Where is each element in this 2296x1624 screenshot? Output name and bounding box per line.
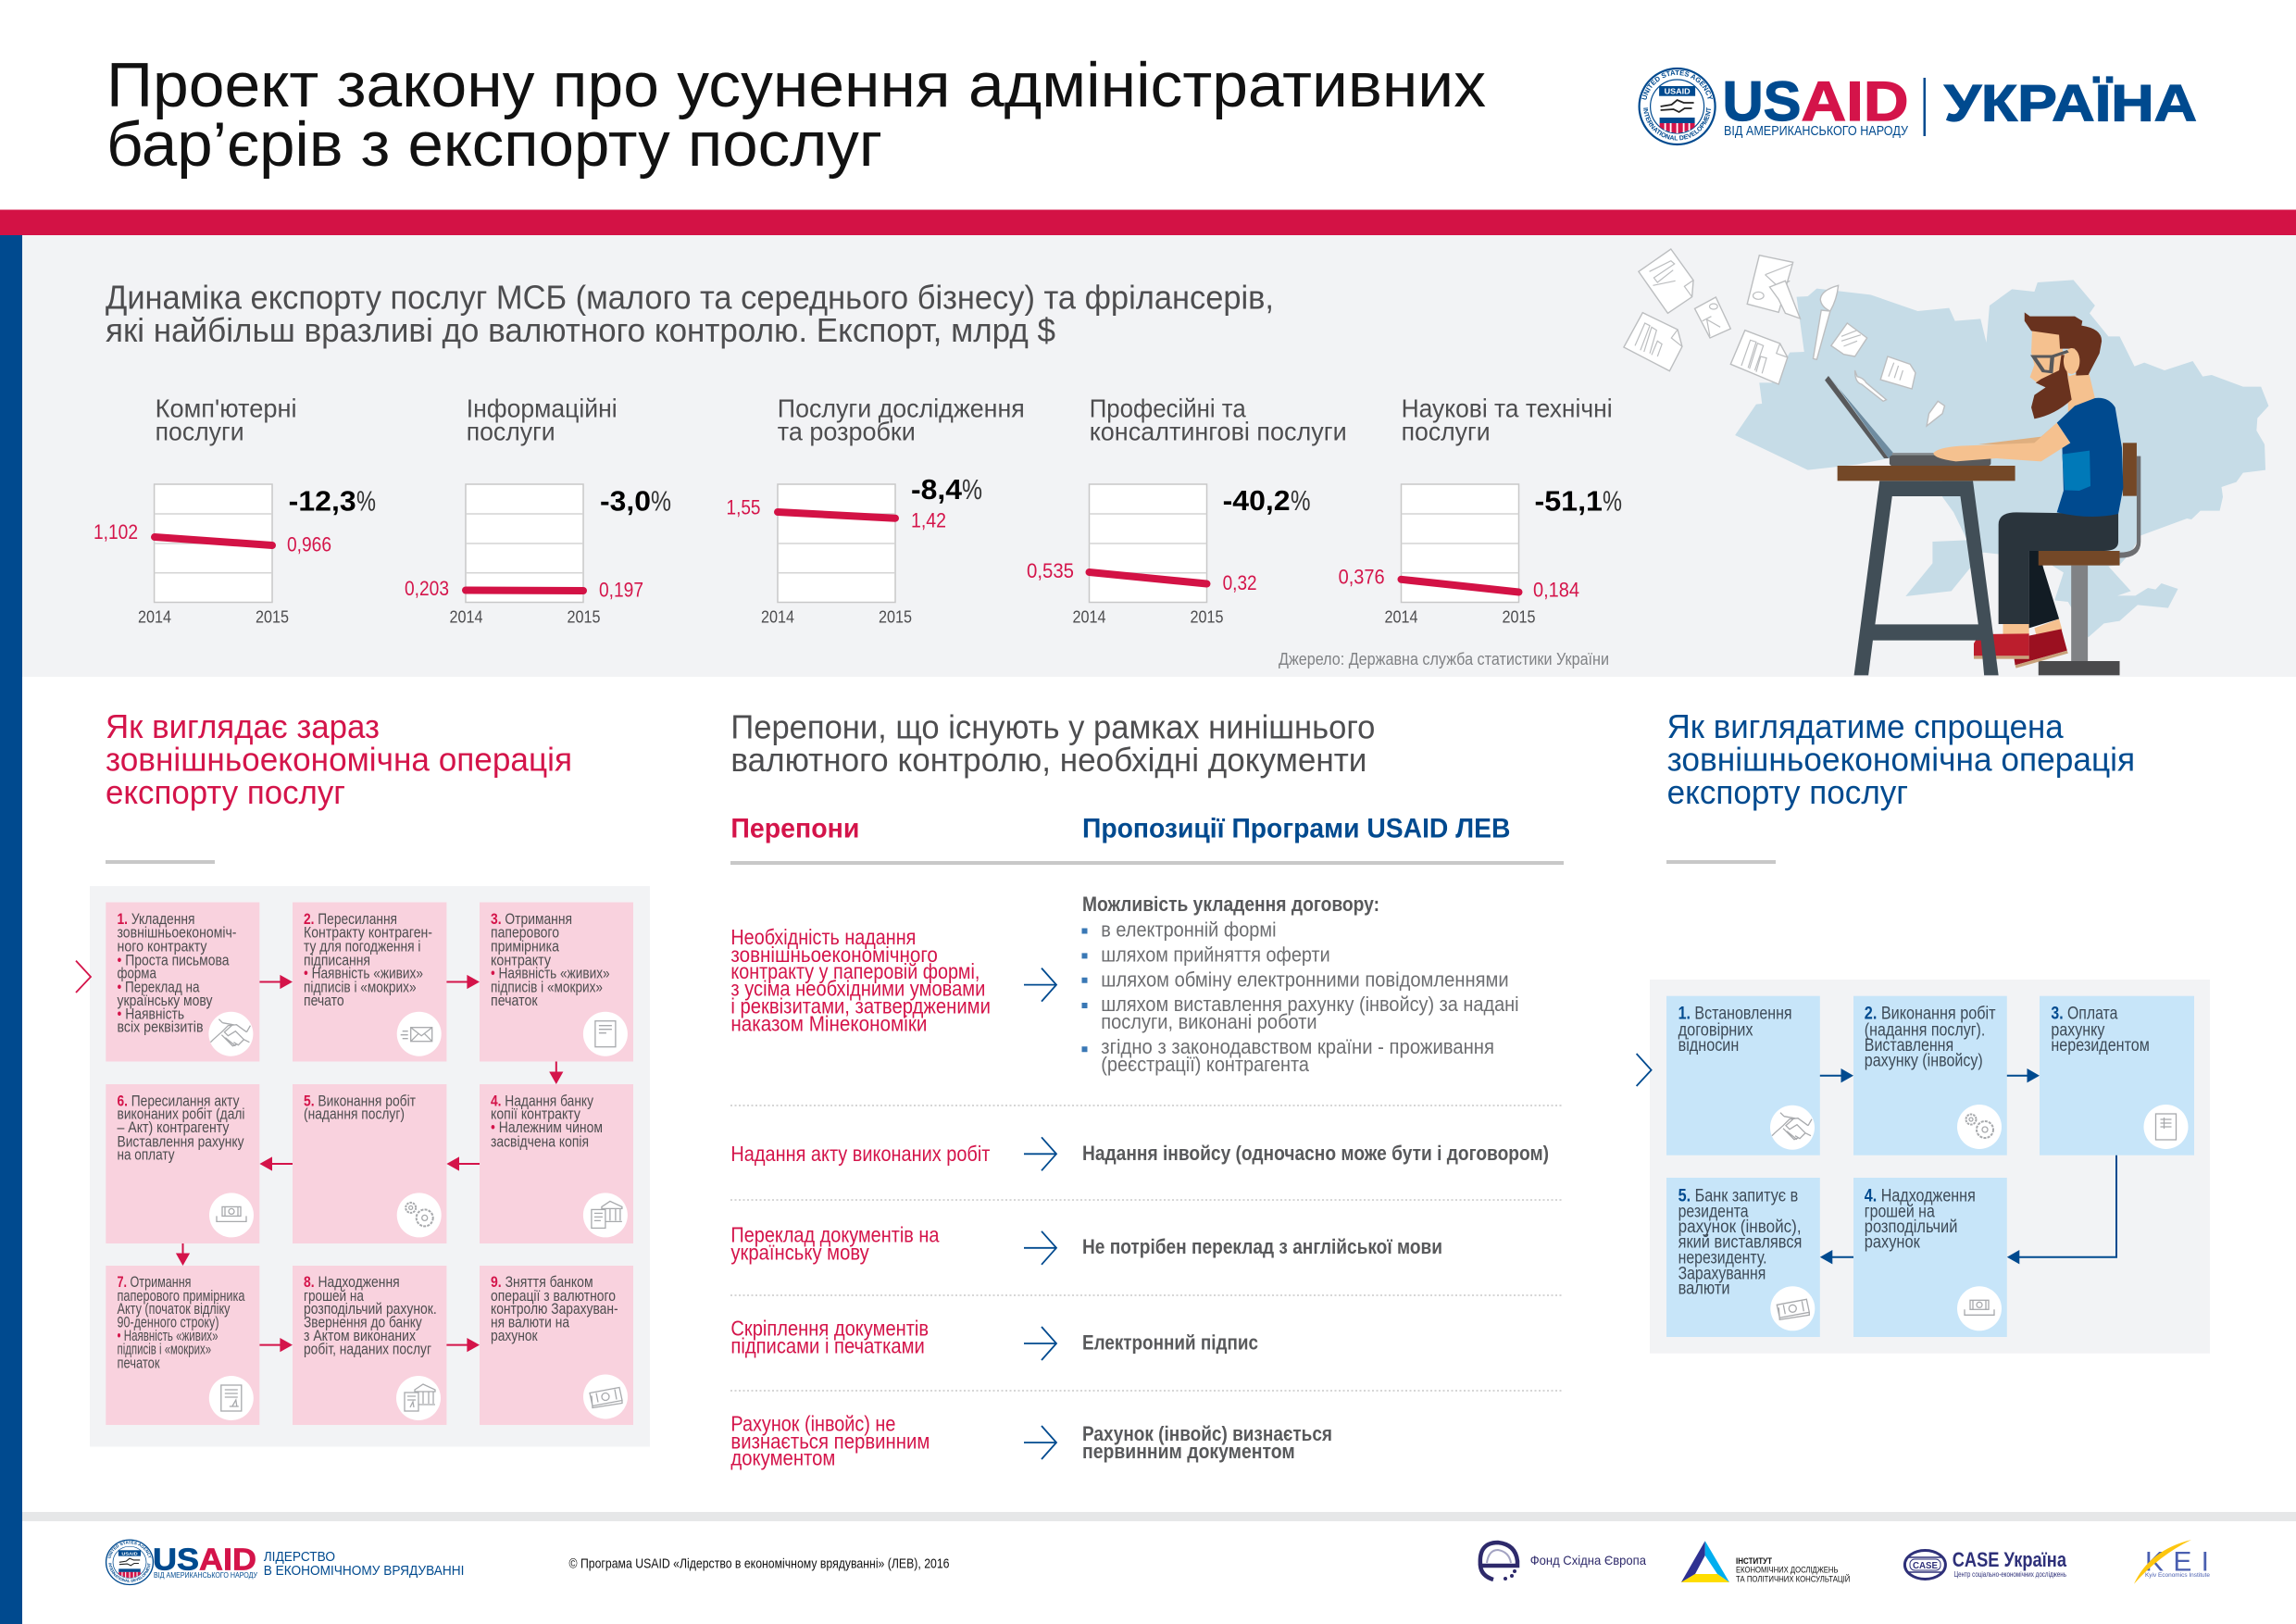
step 4: 4. Надання банку bbox=[491, 1092, 593, 1109]
step 1: • Переклад на bbox=[117, 978, 200, 995]
chart: professional and consulting services: 2015 bbox=[1191, 608, 1224, 627]
step 3: 3. Отримання bbox=[491, 910, 572, 928]
step 8: 8. Надходження bbox=[304, 1273, 400, 1291]
step 4: 4. Надходження bbox=[1865, 1186, 1976, 1206]
partner logo: CASE Ukraine: CASE Україна bbox=[1953, 1548, 2067, 1571]
chart: R&D services: 2014 bbox=[761, 608, 794, 627]
chart: professional and consulting services bbox=[1027, 394, 1347, 627]
step 7: Акту (початок відліку bbox=[117, 1300, 231, 1318]
row 1: paper contract: в електронній формі bbox=[1101, 918, 1276, 941]
row 5: invoice: Рахунок (інвойс) не bbox=[730, 1411, 895, 1435]
chart: computer services: Комп'ютерні bbox=[156, 394, 297, 423]
step 8: грошей на bbox=[304, 1287, 364, 1305]
step 2 bbox=[293, 902, 446, 1061]
step 5: який виставлявся bbox=[1678, 1232, 1802, 1252]
chart: computer services: послуги bbox=[156, 418, 244, 446]
step 9: 9. Зняття банком bbox=[491, 1273, 593, 1291]
chart: R&D services: Послуги дослідження bbox=[778, 394, 1025, 423]
step 8: робіт, наданих послуг bbox=[304, 1341, 431, 1358]
step 1: українську мову bbox=[117, 992, 213, 1009]
panel: simplified process flow bbox=[1637, 980, 2210, 1354]
footer divider bbox=[22, 1512, 2296, 1521]
chart: scientific and technical services: Наукові та технічні bbox=[1402, 394, 1613, 423]
flow arrows: simplified process bbox=[1820, 1068, 2117, 1264]
row 1: paper contract: шляхом обміну електронними повідомленнями bbox=[1101, 968, 1509, 991]
chart: R&D services: та розробки bbox=[778, 418, 916, 446]
step 5 bbox=[1666, 1178, 1820, 1337]
step 4: рахунок bbox=[1865, 1232, 1920, 1252]
step 6: на оплату bbox=[117, 1146, 175, 1163]
chart: R&D services bbox=[726, 394, 1025, 627]
step 9: рахунок bbox=[491, 1327, 538, 1344]
step 7: 90-денного строку) bbox=[117, 1314, 218, 1331]
row 4: signatures: підписами і печатками bbox=[730, 1333, 925, 1357]
step 2: 2. Виконання робіт bbox=[1865, 1005, 1996, 1024]
step 1: договірних bbox=[1678, 1020, 1753, 1040]
chart: information services: 0,197 bbox=[599, 579, 643, 602]
row 1: paper contract: (реєстрації) контрагента bbox=[1101, 1053, 1310, 1076]
chart: computer services: 2014 bbox=[138, 608, 171, 627]
heading: barriers: Перепони, що існують у рамках нинішнього bbox=[730, 707, 1375, 746]
heading: current operation: Як виглядає зараз bbox=[106, 707, 380, 745]
column heading: proposals: Пропозиції Програми USAID ЛЕВ bbox=[1082, 814, 1510, 844]
laptop bbox=[1825, 376, 2070, 466]
chart: information services: Інформаційні bbox=[467, 394, 618, 423]
partner logo: East Europe Foundation bbox=[1480, 1543, 1646, 1580]
step 7 bbox=[106, 1266, 259, 1425]
chart: information services: 2015 bbox=[567, 608, 600, 627]
footer logo: USAID Leadership in Economic Governance: AID bbox=[199, 1543, 256, 1577]
chart: computer services: 0,966 bbox=[287, 533, 331, 556]
source note: Джерело: Державна служба статистики України bbox=[1279, 650, 1609, 668]
heading: simplified operation: експорту послуг bbox=[1667, 773, 1908, 811]
row 1: paper contract: з усіма необхідними умовами bbox=[730, 977, 985, 1001]
footer logo: USAID Leadership in Economic Governance: ВІД АМЕРИКАНСЬКОГО НАРОДУ bbox=[154, 1570, 257, 1580]
freelancer figure bbox=[1974, 312, 2123, 668]
footer logo: USAID Leadership in Economic Governance: В ЕКОНОМІЧНОМУ ВРЯДУВАННІ bbox=[264, 1563, 464, 1579]
logo: USAID Україна: УКРАЇНА bbox=[1944, 73, 2197, 131]
step 3: паперового bbox=[491, 924, 559, 942]
row 3: translation: українську мову bbox=[730, 1240, 869, 1264]
step 2: підписів і «мокрих» bbox=[304, 978, 417, 995]
row 5: invoice: Рахунок (інвойс) визнається bbox=[1082, 1422, 1332, 1445]
step 2: печато bbox=[304, 992, 344, 1009]
step 8: Звернення до банку bbox=[304, 1314, 422, 1331]
accent bar: blue side bbox=[0, 235, 22, 1624]
accent bar: red bbox=[0, 209, 2296, 235]
row 1: paper contract: Можливість укладення договору: bbox=[1082, 893, 1379, 916]
step 3: контракту bbox=[491, 951, 551, 968]
step 1: відносин bbox=[1678, 1036, 1739, 1056]
header title: бар’єрів з експорту послуг bbox=[106, 109, 882, 180]
chart: computer services bbox=[94, 394, 376, 627]
chart: computer services: 2015 bbox=[256, 608, 289, 627]
chart: computer services: -12,3 bbox=[289, 485, 356, 518]
heading: simplified operation bbox=[1667, 707, 2135, 811]
header title bbox=[106, 50, 1486, 180]
marker chevron bbox=[76, 961, 91, 993]
row 1: paper contract: і реквізитами, затвердженими bbox=[730, 993, 991, 1018]
step 7: печаток bbox=[117, 1354, 160, 1372]
chart: computer services: 1,102 bbox=[94, 520, 138, 543]
chart: scientific and technical services: 2014 bbox=[1385, 608, 1418, 627]
step 5: (надання послуг) bbox=[304, 1105, 405, 1122]
step 2 bbox=[1853, 996, 2007, 1156]
partner logo: KEI: Kyiv Economics Institute bbox=[2145, 1573, 2211, 1579]
row 3: translation: Не потрібен переклад з англійської мови bbox=[1082, 1235, 1442, 1258]
marker chevron bbox=[1637, 1054, 1652, 1086]
step 8 bbox=[293, 1266, 446, 1425]
step 2: підписання bbox=[304, 951, 370, 968]
heading: export dynamics bbox=[106, 278, 1274, 349]
step 7: паперового примірника bbox=[117, 1287, 245, 1305]
panel: export dynamics bbox=[22, 235, 2296, 677]
step 2: 2. Пересилання bbox=[304, 910, 397, 928]
heading: export dynamics: які найбільш вразливі до валютного контролю. Експорт, млрд $ bbox=[106, 311, 1055, 349]
logo: USAID Україна bbox=[1640, 69, 2197, 144]
step 2: рахунку (інвойсу) bbox=[1865, 1052, 1983, 1071]
table: barriers and proposals bbox=[730, 814, 1564, 1470]
partner logo: Institute for Economic Research and Policy Consulting: ІНСТИТУТ bbox=[1736, 1556, 1772, 1566]
step 4: копії контракту bbox=[491, 1105, 580, 1122]
chair bbox=[2039, 443, 2140, 675]
step 2: Контракту контраген- bbox=[304, 924, 432, 942]
step 6 bbox=[106, 1084, 259, 1243]
row 2: act of completed works: Надання інвойсу (одночасно може бути і договором) bbox=[1082, 1142, 1549, 1165]
row 1: paper contract: шляхом виставлення рахунку (інвойсу) за надані bbox=[1101, 993, 1519, 1016]
row 5: invoice bbox=[730, 1411, 1332, 1470]
step 4: засвідчена копія bbox=[491, 1133, 589, 1150]
step 1: ного контракту bbox=[117, 937, 207, 956]
step 5: Зарахування bbox=[1678, 1264, 1766, 1283]
logo: USAID Україна: AID bbox=[1802, 70, 1909, 132]
chart: R&D services: -8,4 bbox=[911, 473, 963, 506]
step 6: 6. Пересилання акту bbox=[117, 1092, 240, 1109]
copyright: © Програма USAID «Лідерство в економічному врядуванні» (ЛЕВ), 2016 bbox=[568, 1555, 950, 1571]
flow arrows: current process bbox=[176, 975, 563, 1352]
chart: scientific and technical services: 0,376 bbox=[1339, 565, 1385, 589]
partner logo: Institute for Economic Research and Policy Consulting bbox=[1681, 1541, 1850, 1584]
illustration: freelancer at a laptop over a map of Ukraine bbox=[1624, 249, 2268, 675]
step 3 bbox=[2040, 996, 2194, 1156]
chart: R&D services: 1,55 bbox=[726, 496, 761, 518]
step 5 bbox=[293, 1084, 446, 1243]
step 1: зовнішньоекономіч- bbox=[117, 924, 237, 942]
heading: simplified operation: зовнішньоекономічна операція bbox=[1667, 741, 2135, 778]
step 4: • Належним чином bbox=[491, 1118, 603, 1136]
step 5: нерезиденту. bbox=[1678, 1248, 1767, 1268]
chart: scientific and technical services: послуги bbox=[1402, 418, 1491, 446]
step 3: рахунку bbox=[2051, 1020, 2105, 1040]
step 3: примірника bbox=[491, 937, 559, 956]
step 5: рахунок (інвойс), bbox=[1678, 1218, 1802, 1237]
partner logo: East Europe Foundation: Фонд Східна Європа bbox=[1530, 1553, 1646, 1568]
step 7: підписів і «мокрих» bbox=[117, 1341, 211, 1358]
row 1: paper contract: послуги, виконані роботи bbox=[1101, 1010, 1317, 1033]
row 1: paper contract: контракту у паперовій формі, bbox=[730, 959, 980, 983]
heading: export dynamics: Динаміка експорту послуг МСБ (малого та середнього бізнесу) та фрілансерів, bbox=[106, 278, 1274, 317]
footer logo: USAID Leadership in Economic Governance: ЛІДЕРСТВО bbox=[264, 1549, 335, 1565]
row 4: signatures bbox=[730, 1317, 1258, 1360]
row 3: translation: Переклад документів на bbox=[730, 1223, 940, 1247]
map of Ukraine bbox=[1735, 280, 2268, 637]
panel: current process flow bbox=[76, 886, 650, 1446]
chart: information services: 0,203 bbox=[405, 577, 449, 600]
row 5: invoice: документом bbox=[730, 1446, 835, 1470]
row 3: translation bbox=[730, 1223, 1442, 1265]
step 4 bbox=[1853, 1178, 2007, 1337]
row 4: signatures: Електронний підпис bbox=[1082, 1331, 1258, 1354]
chart: professional and consulting services: 0,32 bbox=[1223, 571, 1257, 594]
step 4: розподільчий bbox=[1865, 1218, 1957, 1237]
step 1: 1. Встановлення bbox=[1678, 1005, 1792, 1024]
chart: information services: -3,0 bbox=[600, 485, 651, 518]
step 7: 7. Отримання bbox=[117, 1273, 191, 1291]
heading: current operation bbox=[106, 707, 572, 811]
heading: current operation: зовнішньоекономічна операція bbox=[106, 741, 572, 778]
step 1 bbox=[106, 902, 259, 1061]
step 5: валюти bbox=[1678, 1279, 1730, 1298]
step 2: • Наявність «живих» bbox=[304, 965, 423, 981]
desk bbox=[1838, 466, 2120, 675]
step 3: 3. Оплата bbox=[2051, 1005, 2118, 1024]
chart: scientific and technical services: 2015 bbox=[1502, 608, 1535, 627]
step 3 bbox=[480, 902, 633, 1061]
step 2: Виставлення bbox=[1865, 1036, 1953, 1056]
step 3: підписів і «мокрих» bbox=[491, 978, 603, 995]
step 9: ня валюти на bbox=[491, 1314, 569, 1331]
step 9 bbox=[480, 1266, 633, 1425]
step 5: резидента bbox=[1678, 1202, 1749, 1221]
step 1: форма bbox=[117, 965, 156, 981]
chart: R&D services: 1,42 bbox=[911, 509, 946, 532]
step 6: – Акт) контрагенту bbox=[117, 1118, 230, 1136]
step 1 bbox=[1666, 996, 1820, 1156]
chart: professional and consulting services: 2014 bbox=[1072, 608, 1105, 627]
heading: barriers bbox=[730, 707, 1375, 779]
step 1: • Наявність bbox=[117, 1005, 184, 1022]
partner logo: CASE Ukraine: Центр соціально-економічних досліджень bbox=[1953, 1570, 2066, 1579]
step 8: з Актом виконаних bbox=[304, 1327, 416, 1344]
chart: scientific and technical services: -51,1 bbox=[1535, 485, 1603, 518]
chart: R&D services: 2015 bbox=[879, 608, 912, 627]
chart: information services bbox=[405, 394, 671, 627]
step 3: печаток bbox=[491, 992, 538, 1009]
chart: information services: послуги bbox=[467, 418, 555, 446]
paper icons bbox=[1624, 249, 1944, 426]
step 9: контролю Зарахуван- bbox=[491, 1300, 618, 1318]
row 4: signatures: Скріплення документів bbox=[730, 1317, 929, 1341]
header title: Проект закону про усунення адміністративних bbox=[106, 50, 1486, 120]
row 2: act of completed works bbox=[730, 1137, 1549, 1170]
chart: professional and consulting services: Професійні та bbox=[1090, 394, 1246, 423]
step 1: 1. Укладення bbox=[117, 910, 194, 928]
partner logo: Institute for Economic Research and Policy Consulting: ЕКОНОМІЧНИХ ДОСЛІДЖЕНЬ bbox=[1736, 1566, 1839, 1575]
step 2: (надання послуг). bbox=[1865, 1020, 1985, 1040]
chart: professional and consulting services: % bbox=[1291, 484, 1311, 517]
chart: computer services: % bbox=[356, 485, 376, 518]
column heading: barriers: Перепони bbox=[730, 814, 859, 844]
step 4: грошей на bbox=[1865, 1202, 1935, 1221]
partner logo: KEI: KEI bbox=[2145, 1547, 2209, 1578]
chart: R&D services: % bbox=[962, 473, 982, 506]
heading: current operation: експорту послуг bbox=[106, 773, 345, 811]
chart: scientific and technical services: % bbox=[1603, 485, 1622, 518]
chart: scientific and technical services bbox=[1339, 394, 1622, 627]
step 7: • Наявність «живих» bbox=[117, 1327, 218, 1344]
logo: USAID Україна: ВІД АМЕРИКАНСЬКОГО НАРОДУ bbox=[1724, 123, 1908, 139]
row 1: paper contract: наказом Мінекономіки bbox=[730, 1012, 927, 1036]
row 1: paper contract: згідно з законодавством країни - проживання bbox=[1101, 1035, 1494, 1058]
step 9: операції з валютного bbox=[491, 1287, 616, 1305]
row 5: invoice: первинним документом bbox=[1082, 1440, 1295, 1463]
footer logo: USAID Leadership in Economic Governance bbox=[106, 1540, 464, 1584]
chart: professional and consulting services: консалтингові послуги bbox=[1090, 418, 1347, 446]
step 8: розподільчий рахунок. bbox=[304, 1300, 437, 1318]
step 6: Виставлення рахунку bbox=[117, 1133, 244, 1150]
partner logo: CASE Ukraine: CASE bbox=[1913, 1561, 1938, 1571]
chart: scientific and technical services: 0,184 bbox=[1533, 579, 1579, 602]
chart: information services: % bbox=[651, 485, 671, 518]
partner logo: KEI bbox=[2134, 1540, 2211, 1584]
step 1: • Проста письмова bbox=[117, 951, 230, 968]
footer logo: USAID Leadership in Economic Governance: US bbox=[153, 1543, 199, 1577]
step 5: 5. Виконання робіт bbox=[304, 1092, 416, 1109]
chart: professional and consulting services: 0,535 bbox=[1027, 559, 1074, 582]
row 2: act of completed works: Надання акту виконаних робіт bbox=[730, 1142, 991, 1166]
step 3: нерезидентом bbox=[2051, 1036, 2150, 1056]
step 5: 5. Банк запитує в bbox=[1678, 1186, 1798, 1206]
row 1: paper contract: Необхідність надання bbox=[730, 925, 916, 949]
partner logo: CASE Ukraine bbox=[1904, 1548, 2067, 1580]
partner logo: Institute for Economic Research and Policy Consulting: ТА ПОЛІТИЧНИХ КОНСУЛЬТАЦІЙ bbox=[1736, 1574, 1850, 1584]
step 2: ту для погодження і bbox=[304, 937, 420, 956]
heading: barriers: валютного контролю, необхідні документи bbox=[730, 741, 1366, 779]
step 4 bbox=[480, 1084, 633, 1243]
step 6: виконаних робіт (далі bbox=[117, 1105, 244, 1122]
row 1: paper contract: зовнішньоекономічного bbox=[730, 943, 938, 967]
chart: professional and consulting services: -40,2 bbox=[1223, 484, 1291, 517]
step 1: всіх реквізитів bbox=[117, 1018, 204, 1036]
logo: USAID Україна: US bbox=[1722, 70, 1802, 132]
chart: information services: 2014 bbox=[450, 608, 483, 627]
step 3: • Наявність «живих» bbox=[491, 965, 610, 981]
row 1: paper contract bbox=[730, 893, 1519, 1076]
heading: simplified operation: Як виглядатиме спрощена bbox=[1667, 707, 2065, 745]
row 5: invoice: визнається первинним bbox=[730, 1430, 930, 1454]
row 1: paper contract: шляхом прийняття оферти bbox=[1101, 943, 1330, 966]
